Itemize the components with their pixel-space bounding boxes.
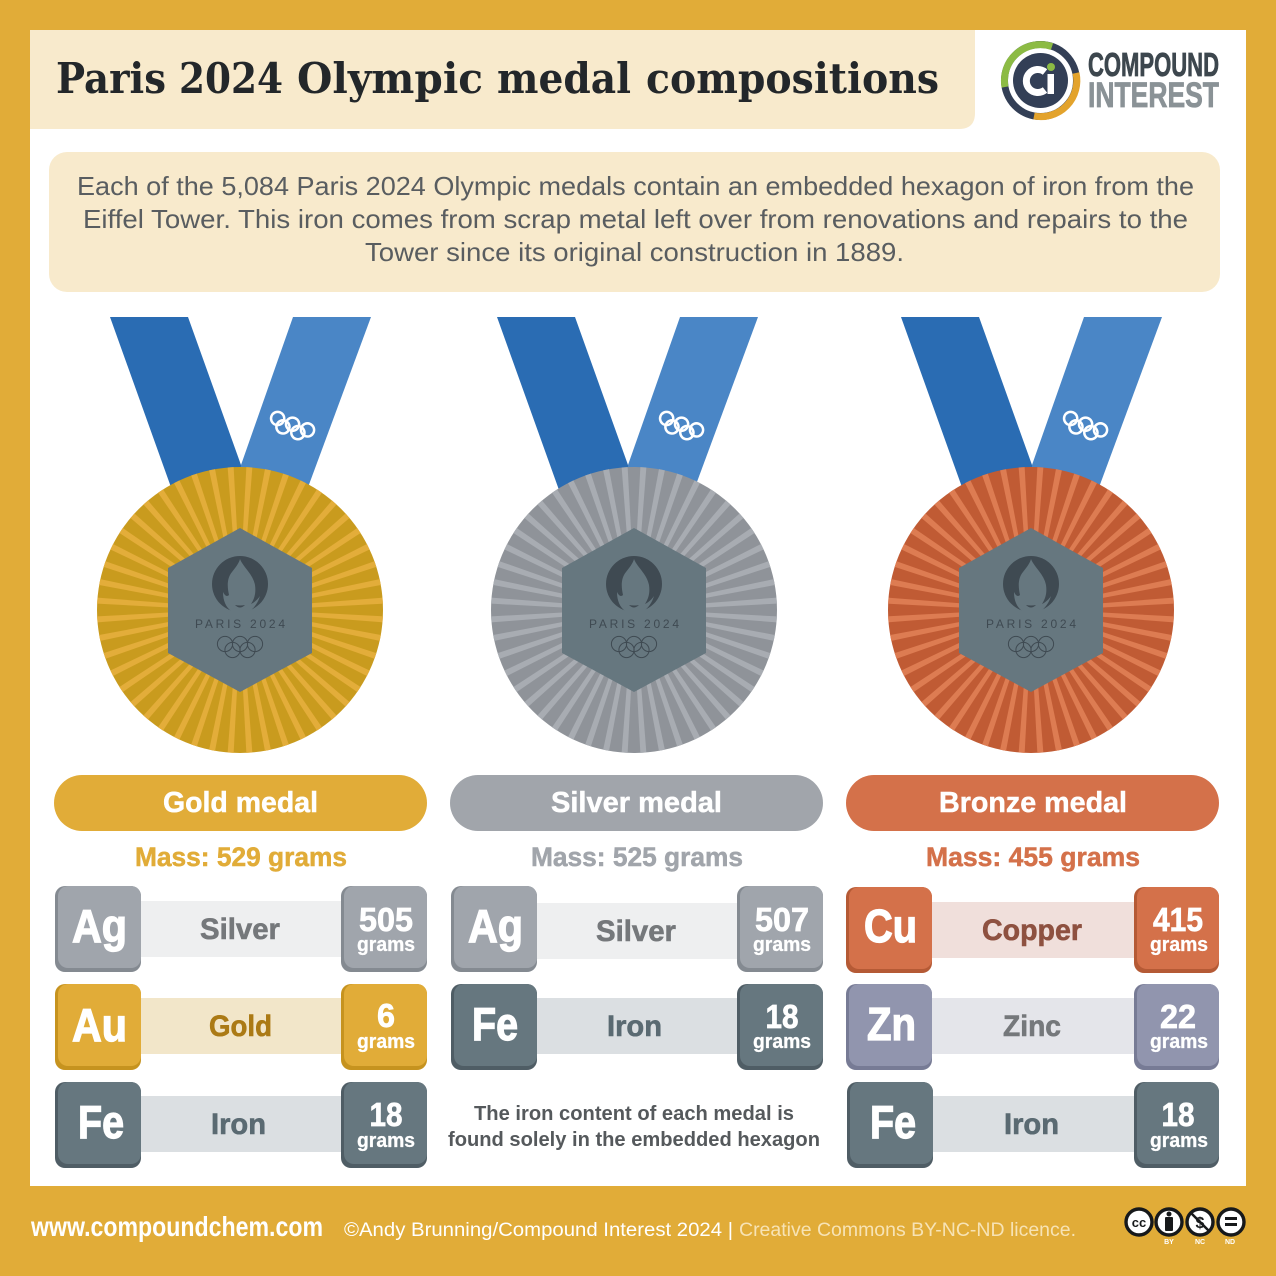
logo: Compound Interest: INTEREST xyxy=(1088,76,1219,115)
title: 2024 xyxy=(179,54,283,103)
bronze medal pill: Bronze medal xyxy=(939,787,1127,819)
silver medal pill xyxy=(450,775,823,831)
row: iron in gold medal: Fe xyxy=(78,1096,124,1148)
row: silver in silver medal: Silver xyxy=(596,915,676,948)
row: iron in gold medal: Iron xyxy=(211,1108,266,1141)
row: iron in silver medal xyxy=(451,984,823,1070)
row: iron in gold medal: 18 xyxy=(370,1096,402,1133)
row: iron in silver medal: Fe xyxy=(472,998,518,1050)
title: Paris xyxy=(56,54,166,103)
icon: creative commons badges: BY xyxy=(1164,1239,1174,1246)
row: silver in gold medal: Silver xyxy=(200,913,280,946)
medal disc xyxy=(477,453,791,767)
row: copper in bronze medal: Cu xyxy=(864,900,917,952)
credit: ©Andy Brunning/Compound Interest 2024 | xyxy=(344,1220,733,1241)
ribbon xyxy=(497,317,758,490)
website: www.compoundchem.com xyxy=(30,1211,323,1242)
iron note xyxy=(448,1103,820,1151)
intro text panel: Eiffel Tower. This iron comes from scrap metal left over from renovations and repairs to the xyxy=(83,204,1188,234)
title: compositions xyxy=(646,54,939,103)
row: zinc in bronze medal: 22 xyxy=(1160,998,1196,1035)
title: medal xyxy=(497,54,631,103)
row: silver in gold medal: 505 xyxy=(359,901,413,938)
row: silver in silver medal xyxy=(451,886,823,972)
silver mass: Mass: 525 grams xyxy=(531,842,743,872)
row: zinc in bronze medal: grams xyxy=(1150,1031,1208,1053)
row: silver in gold medal xyxy=(55,886,427,972)
row: zinc in bronze medal: Zn xyxy=(867,998,916,1050)
bronze medal illustration xyxy=(874,317,1188,767)
iron note: The iron content of each medal is xyxy=(474,1103,794,1125)
silver medal pill: Silver medal xyxy=(551,787,722,819)
gold medal pill xyxy=(54,775,427,831)
bronze medal pill xyxy=(846,775,1219,831)
gold mass: Mass: 529 grams xyxy=(135,842,347,872)
footer xyxy=(30,1209,1244,1246)
row: iron in bronze medal: Fe xyxy=(870,1096,916,1148)
title banner xyxy=(30,30,975,129)
row: iron in silver medal: Iron xyxy=(607,1010,662,1043)
row: gold in gold medal xyxy=(55,984,427,1070)
silver medal illustration xyxy=(477,317,791,767)
row: copper in bronze medal: 415 xyxy=(1153,901,1203,938)
row: silver in gold medal: Ag xyxy=(72,900,127,952)
row: iron in bronze medal xyxy=(847,1082,1219,1168)
bronze mass: Mass: 455 grams xyxy=(926,842,1140,872)
row: iron in bronze medal: grams xyxy=(1150,1130,1208,1152)
row: copper in bronze medal: Copper xyxy=(982,914,1082,947)
intro text panel: Tower since its original construction in 1889. xyxy=(365,237,904,267)
row: iron in silver medal: 18 xyxy=(766,998,798,1035)
row: gold in gold medal: 6 xyxy=(377,997,395,1034)
title xyxy=(56,54,939,103)
title: Olympic xyxy=(297,54,483,103)
row: iron in gold medal: grams xyxy=(357,1130,415,1152)
icon: creative commons badges: ND xyxy=(1225,1239,1235,1246)
icon: creative commons badges xyxy=(1126,1209,1244,1246)
iron note: found solely in the embedded hexagon xyxy=(448,1129,820,1151)
row: iron in gold medal xyxy=(55,1082,427,1168)
bronze column xyxy=(846,775,1219,1168)
row: iron in bronze medal: Iron xyxy=(1004,1108,1059,1141)
icon: creative commons badges: $ xyxy=(1196,1215,1205,1232)
row: gold in gold medal: Gold xyxy=(209,1010,272,1043)
gold medal pill: Gold medal xyxy=(163,787,318,819)
intro text panel: Each of the 5,084 Paris 2024 Olympic medals contain an embedded hexagon of iron from the xyxy=(77,171,1194,201)
intro text panel xyxy=(49,152,1220,292)
icon: creative commons badges: NC xyxy=(1195,1239,1205,1246)
medal disc xyxy=(874,453,1188,767)
ribbon xyxy=(110,317,371,490)
gold medal illustration xyxy=(83,317,397,767)
hexagon emblem xyxy=(562,528,706,692)
row: silver in gold medal: grams xyxy=(357,934,415,956)
silver column xyxy=(448,775,823,1151)
row: zinc in bronze medal xyxy=(846,984,1219,1070)
gold column xyxy=(54,775,427,1168)
icon: logo ring xyxy=(1004,44,1077,117)
icon: creative commons badges: cc xyxy=(1132,1215,1146,1230)
hexagon emblem xyxy=(168,528,312,692)
row: iron in bronze medal: 18 xyxy=(1162,1096,1194,1133)
licence: Creative Commons BY-NC-ND licence. xyxy=(739,1220,1076,1241)
row: silver in silver medal: Ag xyxy=(468,900,523,952)
row: silver in silver medal: 507 xyxy=(755,901,809,938)
row: gold in gold medal: grams xyxy=(357,1031,415,1053)
row: copper in bronze medal: grams xyxy=(1150,934,1208,956)
ribbon xyxy=(901,317,1162,490)
logo: Compound Interest xyxy=(1004,44,1219,117)
hexagon emblem xyxy=(959,528,1103,692)
row: silver in silver medal: grams xyxy=(753,934,811,956)
medal disc xyxy=(83,453,397,767)
row: gold in gold medal: Au xyxy=(72,999,127,1051)
row: zinc in bronze medal: Zinc xyxy=(1003,1010,1061,1043)
row: copper in bronze medal xyxy=(846,887,1219,973)
row: iron in silver medal: grams xyxy=(753,1031,811,1053)
